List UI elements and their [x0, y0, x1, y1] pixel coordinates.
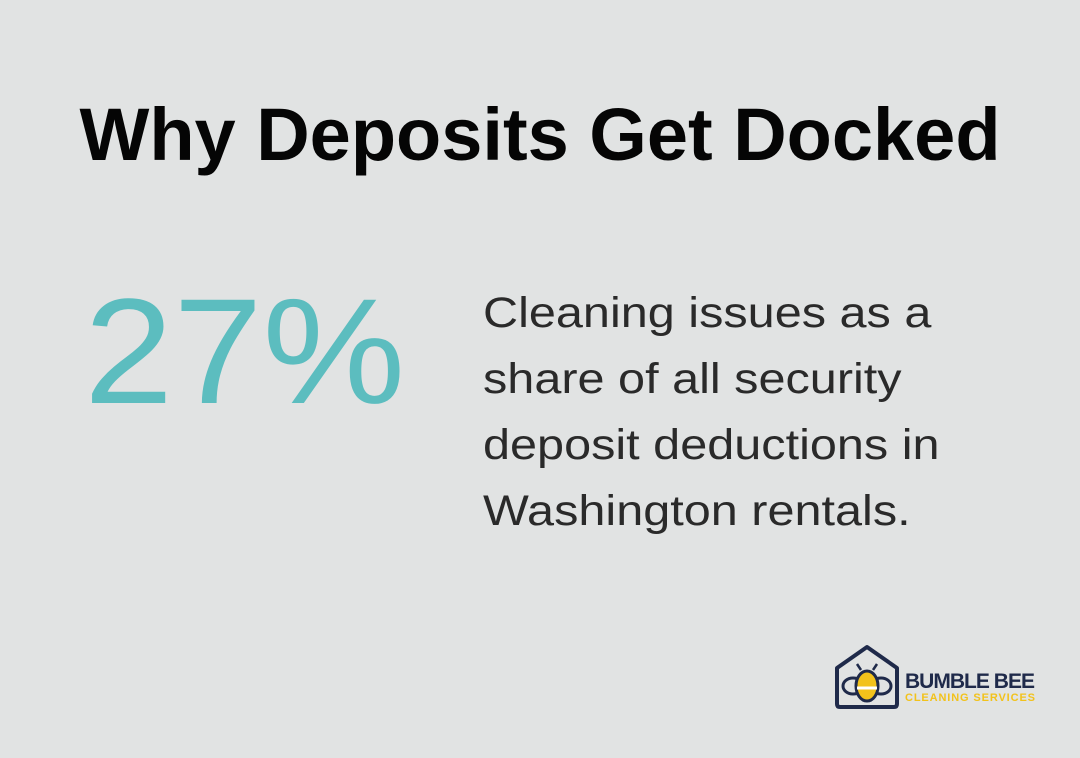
description text: Washington rentals. [483, 487, 911, 535]
logo [835, 645, 1035, 709]
stat number: 27% [84, 267, 405, 435]
description text: Cleaning issues as a [483, 289, 931, 337]
icon: house bee [837, 647, 897, 707]
title: Why Deposits Get Docked [79, 93, 1001, 176]
description text: deposit deductions in [483, 421, 940, 469]
description text [483, 289, 940, 535]
description text: share of all security [483, 355, 902, 403]
brand tagline: CLEANING SERVICES [905, 692, 1035, 704]
brand name: BUMBLE BEE [905, 670, 1035, 693]
